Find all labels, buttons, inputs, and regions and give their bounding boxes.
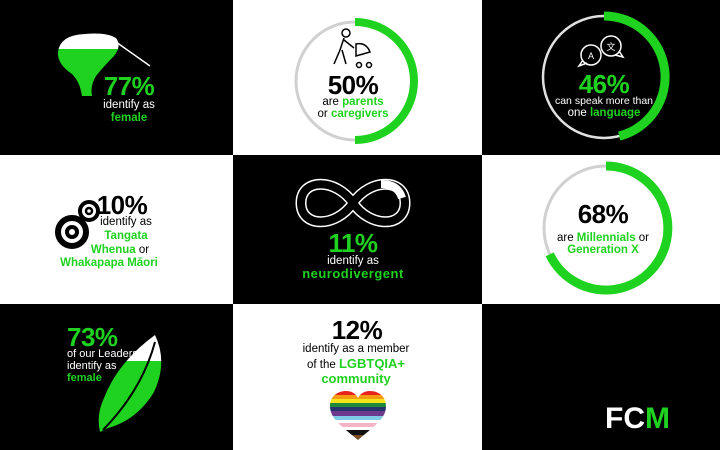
- stat text: 46%: [579, 69, 630, 99]
- stat text: are parents: [322, 96, 384, 108]
- stat text: identify as a member: [303, 343, 410, 355]
- panel: leaders 73%: [67, 322, 161, 432]
- stat text: [318, 70, 388, 120]
- ring chart: [543, 16, 665, 138]
- stat text: can speak more than: [555, 95, 653, 107]
- stat text: community: [321, 371, 391, 386]
- stat text: neurodivergent: [302, 266, 404, 281]
- ring chart: [296, 22, 414, 140]
- icon: rainbow heart: [330, 391, 386, 440]
- stat text: one language: [568, 107, 640, 119]
- icon: koru: [58, 202, 98, 246]
- panel: LGBTQIA+ 12%: [303, 315, 410, 441]
- stat text: [302, 228, 404, 281]
- panel: Māori 10%: [58, 190, 158, 269]
- icon: infinity: [301, 184, 405, 222]
- icon: speech bubbles: [579, 36, 623, 66]
- panel: generations 68%: [544, 166, 668, 290]
- stat text: identify as: [327, 255, 379, 267]
- stat text: identify as: [103, 99, 155, 111]
- stat text: [555, 69, 653, 119]
- stat text: 50%: [328, 70, 379, 100]
- stat text: identify as: [67, 360, 117, 372]
- stat text: female: [67, 372, 102, 384]
- stat text: 73%: [67, 322, 118, 352]
- stat text: [67, 322, 138, 384]
- icon: parent with stroller: [334, 29, 372, 68]
- icon: fern: [99, 335, 161, 432]
- stat text: of our Leaders: [67, 348, 138, 360]
- stat text: Whenua or: [91, 244, 149, 256]
- panel: neurodivergent 11%: [301, 184, 405, 281]
- stat text: of the LGBTQIA+: [307, 356, 405, 371]
- stat text: 12%: [332, 315, 383, 345]
- stat text: Generation X: [567, 244, 639, 256]
- icon: speech bubbles: A: [588, 51, 594, 61]
- stat text: 77%: [104, 71, 155, 101]
- ring chart: [544, 166, 668, 290]
- stat text: [60, 190, 158, 269]
- stat text: 10%: [97, 190, 148, 220]
- panel: parents 50%: [296, 22, 414, 140]
- stat text: female: [111, 112, 147, 124]
- stat text: Tangata: [104, 230, 148, 242]
- icon: speech bubbles: 文: [606, 41, 616, 52]
- panel: languages 46%: [543, 16, 665, 138]
- icon: kiwi: [58, 34, 150, 96]
- stat text: [557, 199, 649, 256]
- stat text: or caregivers: [318, 108, 388, 120]
- stat text: [303, 315, 410, 386]
- logo: FCM: FCM: [605, 402, 670, 435]
- panel: kiwi 77%: [58, 34, 155, 124]
- stat text: identify as: [100, 216, 152, 228]
- stat text: [103, 71, 155, 124]
- stat text: Whakapapa Māori: [60, 257, 158, 269]
- stat text: 11%: [328, 228, 378, 258]
- stat text: 68%: [578, 199, 629, 229]
- stat text: are Millennials or: [557, 232, 649, 244]
